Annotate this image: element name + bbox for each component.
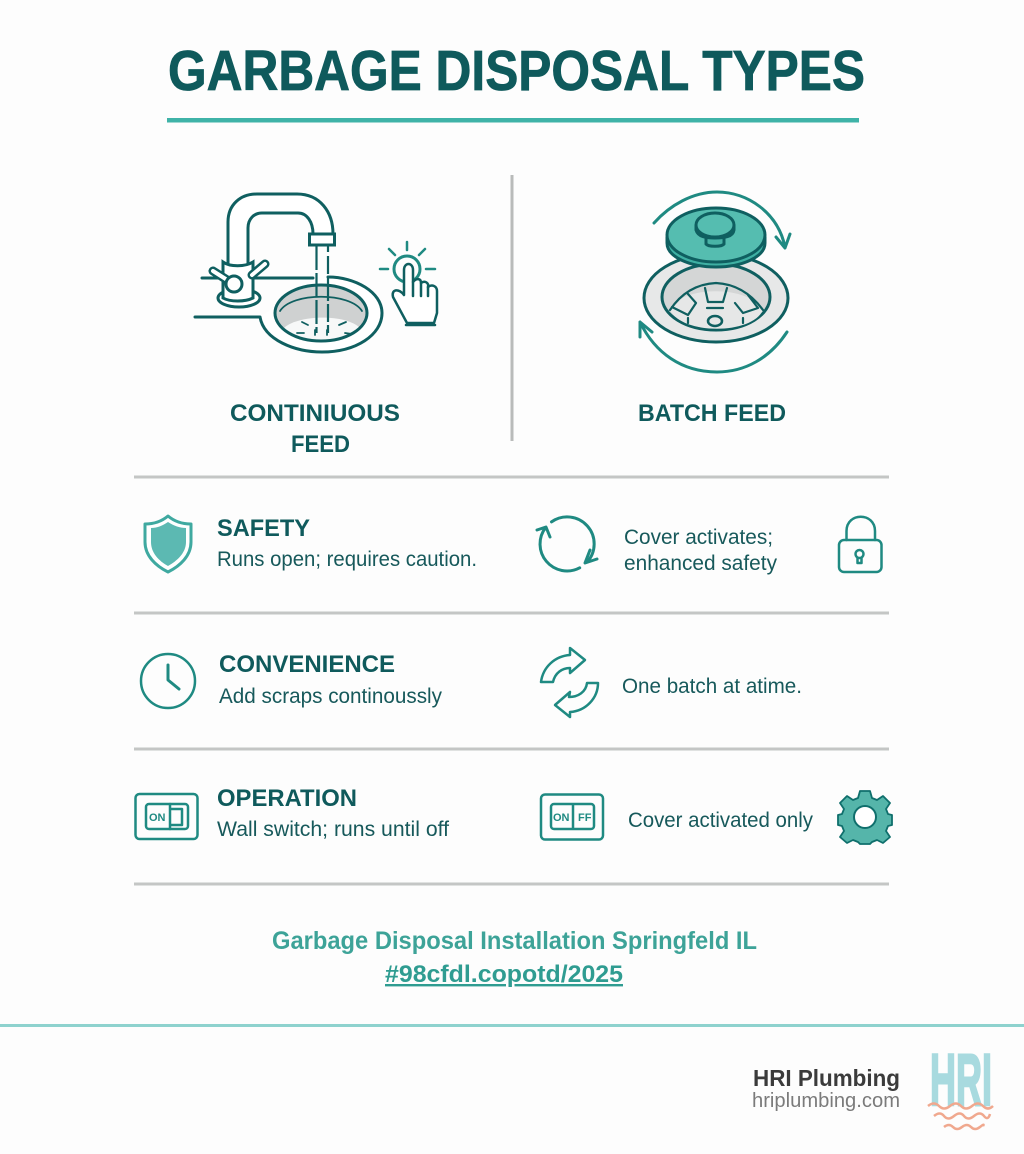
text: convenience continuous: Add scraps continoussly — [219, 685, 442, 708]
icon: on off switch: ON — [553, 812, 570, 824]
text: safety batch: Cover activates; — [624, 526, 773, 549]
icon: on off switch: FF — [578, 812, 592, 824]
text: operation continuous — [217, 785, 449, 841]
icon: faucet and sink — [195, 194, 382, 352]
text: convenience continuous: CONVENIENCE — [219, 651, 395, 678]
row: convenience — [141, 648, 802, 717]
icon: padlock — [839, 517, 882, 572]
text: safety batch: enhanced safety — [624, 552, 777, 575]
text: convenience batch: One batch at atime. — [622, 675, 802, 698]
label: continuous feed: FEED — [291, 431, 350, 458]
panel: continuous feed — [195, 194, 437, 458]
arrow: clockwise bottom — [640, 322, 787, 372]
icon: rotating arrows — [537, 517, 597, 571]
label: batch feed: BATCH FEED — [638, 400, 786, 427]
label: continuous feed: CONTINIUOUS — [230, 400, 400, 427]
text: safety continuous: Runs open; requires caution. — [217, 548, 477, 571]
text: convenience continuous — [219, 651, 442, 708]
icon: finger pressing button — [380, 242, 437, 325]
icon: clock — [141, 654, 195, 708]
panel: batch feed — [638, 192, 790, 427]
text: safety continuous — [217, 515, 477, 571]
title: GARBAGE DISPOSAL TYPES — [168, 39, 865, 103]
icon: wall switch — [136, 794, 198, 839]
icon: gear — [838, 791, 892, 844]
footer caption — [272, 927, 757, 988]
text: operation continuous: OPERATION — [217, 785, 357, 812]
label: continuous feed — [230, 400, 400, 458]
footer caption: #98cfdl.copotd/2025 — [385, 961, 623, 988]
row: operation — [136, 785, 892, 844]
text: safety batch — [624, 526, 777, 575]
icon: on off switch — [541, 794, 603, 840]
icon: swap arrows — [541, 648, 598, 717]
icon: batch feed cover and drain — [644, 208, 788, 342]
text: operation batch: Cover activated only — [628, 809, 813, 832]
text: safety continuous: SAFETY — [217, 515, 310, 542]
brand name — [752, 1065, 900, 1112]
text: operation continuous: Wall switch; runs until off — [217, 818, 449, 841]
icon: wall switch: ON — [149, 812, 166, 824]
icon: shield — [145, 516, 191, 572]
brand name: HRI Plumbing — [753, 1065, 900, 1091]
logo: HRI — [928, 1040, 993, 1129]
row: safety — [145, 515, 882, 575]
arrow: clockwise top — [654, 192, 790, 248]
brand name: hriplumbing.com — [752, 1090, 900, 1112]
footer caption: Garbage Disposal Installation Springfeld IL — [272, 927, 757, 955]
title underline — [167, 118, 859, 122]
